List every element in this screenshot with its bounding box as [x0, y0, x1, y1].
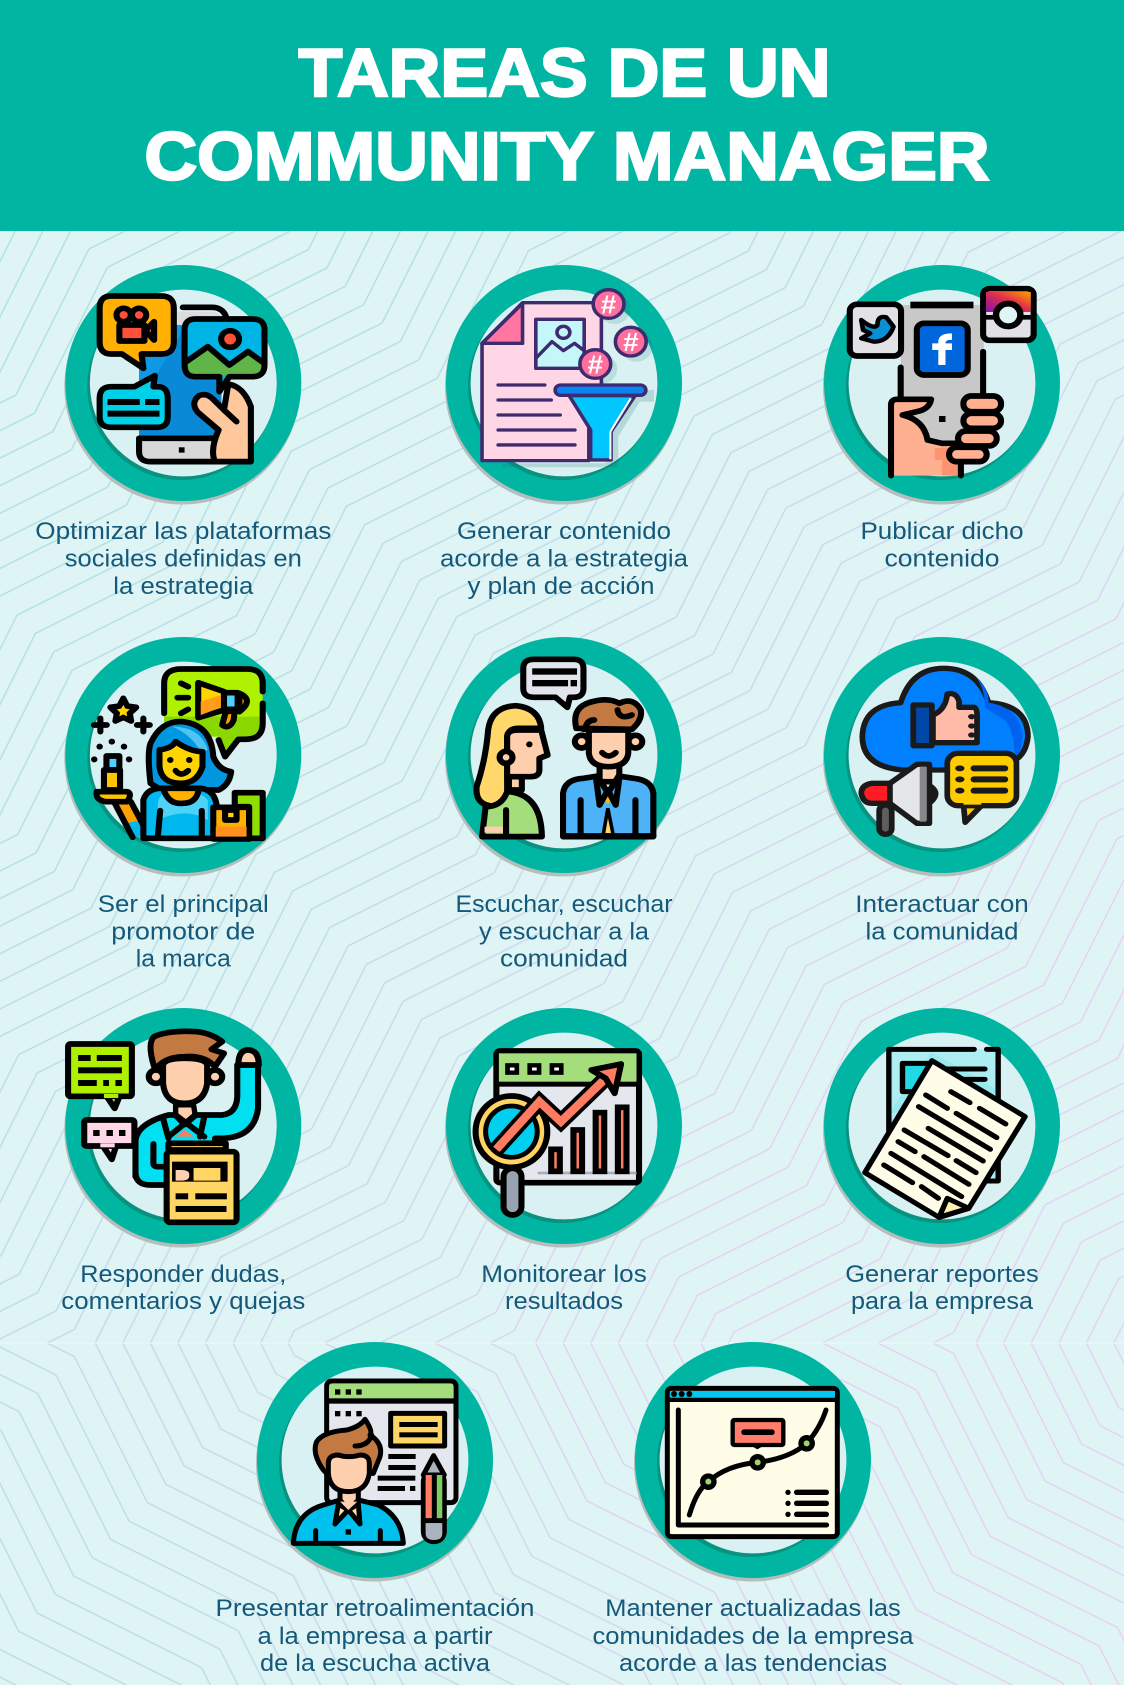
badge ring — [64, 1008, 301, 1248]
title — [144, 35, 990, 194]
caption: Publicar dicho — [860, 518, 1024, 545]
caption — [592, 1595, 914, 1677]
caption: comunidades de la empresa — [592, 1623, 914, 1650]
caption: Responder dudas, — [80, 1261, 286, 1288]
caption — [61, 1261, 305, 1315]
icon: report sheets — [865, 1049, 1025, 1217]
panel: escuchar a la comunidad — [445, 637, 682, 973]
caption: Generar contenido — [457, 518, 671, 545]
caption: y plan de acción — [468, 573, 654, 600]
caption: Mantener actualizadas las — [605, 1595, 901, 1622]
title: COMMUNITY MANAGER — [144, 118, 990, 194]
caption: resultados — [505, 1288, 623, 1315]
icon: man answering with chat bubbles — [68, 1031, 259, 1222]
caption: Escuchar, escuchar — [456, 891, 673, 918]
badge ring — [64, 637, 301, 876]
icon: woman promoting with megaphone — [91, 669, 263, 839]
caption: promotor de — [111, 918, 255, 945]
title: TAREAS DE UN — [298, 35, 830, 111]
badge ring — [634, 1342, 871, 1582]
panel: interactuar con la comunidad — [823, 637, 1060, 945]
badge ring — [445, 1008, 682, 1248]
caption: Monitorear los — [481, 1261, 647, 1288]
panel: publicar contenido — [823, 265, 1060, 572]
caption: Optimizar las plataformas — [35, 518, 331, 545]
panel: promotor de la marca — [64, 637, 301, 973]
panel: responder dudas — [61, 1008, 305, 1315]
caption: Ser el principal — [98, 891, 269, 918]
icon: document, funnel and hashtags — [482, 290, 654, 467]
caption — [481, 1261, 647, 1315]
icon: cloud with thumbs up, megaphone and chat — [861, 668, 1028, 834]
badge ring — [823, 1008, 1060, 1248]
caption: contenido — [884, 546, 1000, 572]
icon: document, funnel and hashtags: # — [601, 290, 616, 319]
caption — [35, 518, 331, 600]
caption: y escuchar a la — [479, 918, 650, 945]
badge ring — [445, 265, 682, 504]
icon: document, funnel and hashtags: # — [588, 350, 603, 379]
badge ring — [256, 1342, 493, 1582]
panel: generar reportes — [823, 1008, 1060, 1315]
caption: Interactuar con — [855, 891, 1029, 918]
caption — [845, 1261, 1039, 1315]
caption — [855, 891, 1029, 945]
header band with title — [0, 0, 1124, 231]
caption: comentarios y quejas — [61, 1288, 305, 1315]
icon: trend chart window — [667, 1388, 837, 1537]
icon: phone with social bubbles — [100, 296, 264, 462]
badge ring — [823, 265, 1060, 504]
icon: document, funnel and hashtags: # — [623, 328, 639, 357]
icon: man presenting window and pencil — [293, 1381, 456, 1543]
icon: hand with phone and social logos — [850, 289, 1034, 476]
caption — [216, 1595, 534, 1677]
panel: optimizar plataformas — [35, 265, 331, 600]
caption: para la empresa — [851, 1288, 1034, 1315]
badge ring — [445, 637, 682, 876]
caption: la marca — [136, 946, 231, 973]
caption: Generar reportes — [845, 1261, 1039, 1288]
caption: acorde a la estrategia — [440, 546, 689, 572]
caption — [440, 518, 689, 600]
panel: generar contenido — [440, 265, 689, 600]
caption — [98, 891, 269, 973]
caption: la comunidad — [866, 918, 1018, 945]
caption: acorde a las tendencias — [619, 1650, 887, 1677]
badge ring — [64, 265, 301, 504]
caption — [456, 891, 673, 973]
icon: woman and man talking — [477, 659, 653, 837]
caption: la estrategia — [113, 573, 254, 600]
caption — [860, 518, 1024, 572]
caption: Presentar retroalimentación — [216, 1595, 534, 1622]
icon: dashboard with magnifier and rising arrow — [476, 1051, 639, 1215]
caption: comunidad — [500, 946, 628, 973]
panel: monitorear resultados — [445, 1008, 682, 1315]
panel: presentar retroalimentación — [216, 1342, 534, 1677]
caption: de la escucha activa — [260, 1650, 491, 1677]
panel: mantener actualizadas — [592, 1342, 914, 1677]
badge ring — [823, 637, 1060, 876]
caption: a la empresa a partir — [258, 1623, 492, 1650]
caption: sociales definidas en — [65, 546, 302, 572]
